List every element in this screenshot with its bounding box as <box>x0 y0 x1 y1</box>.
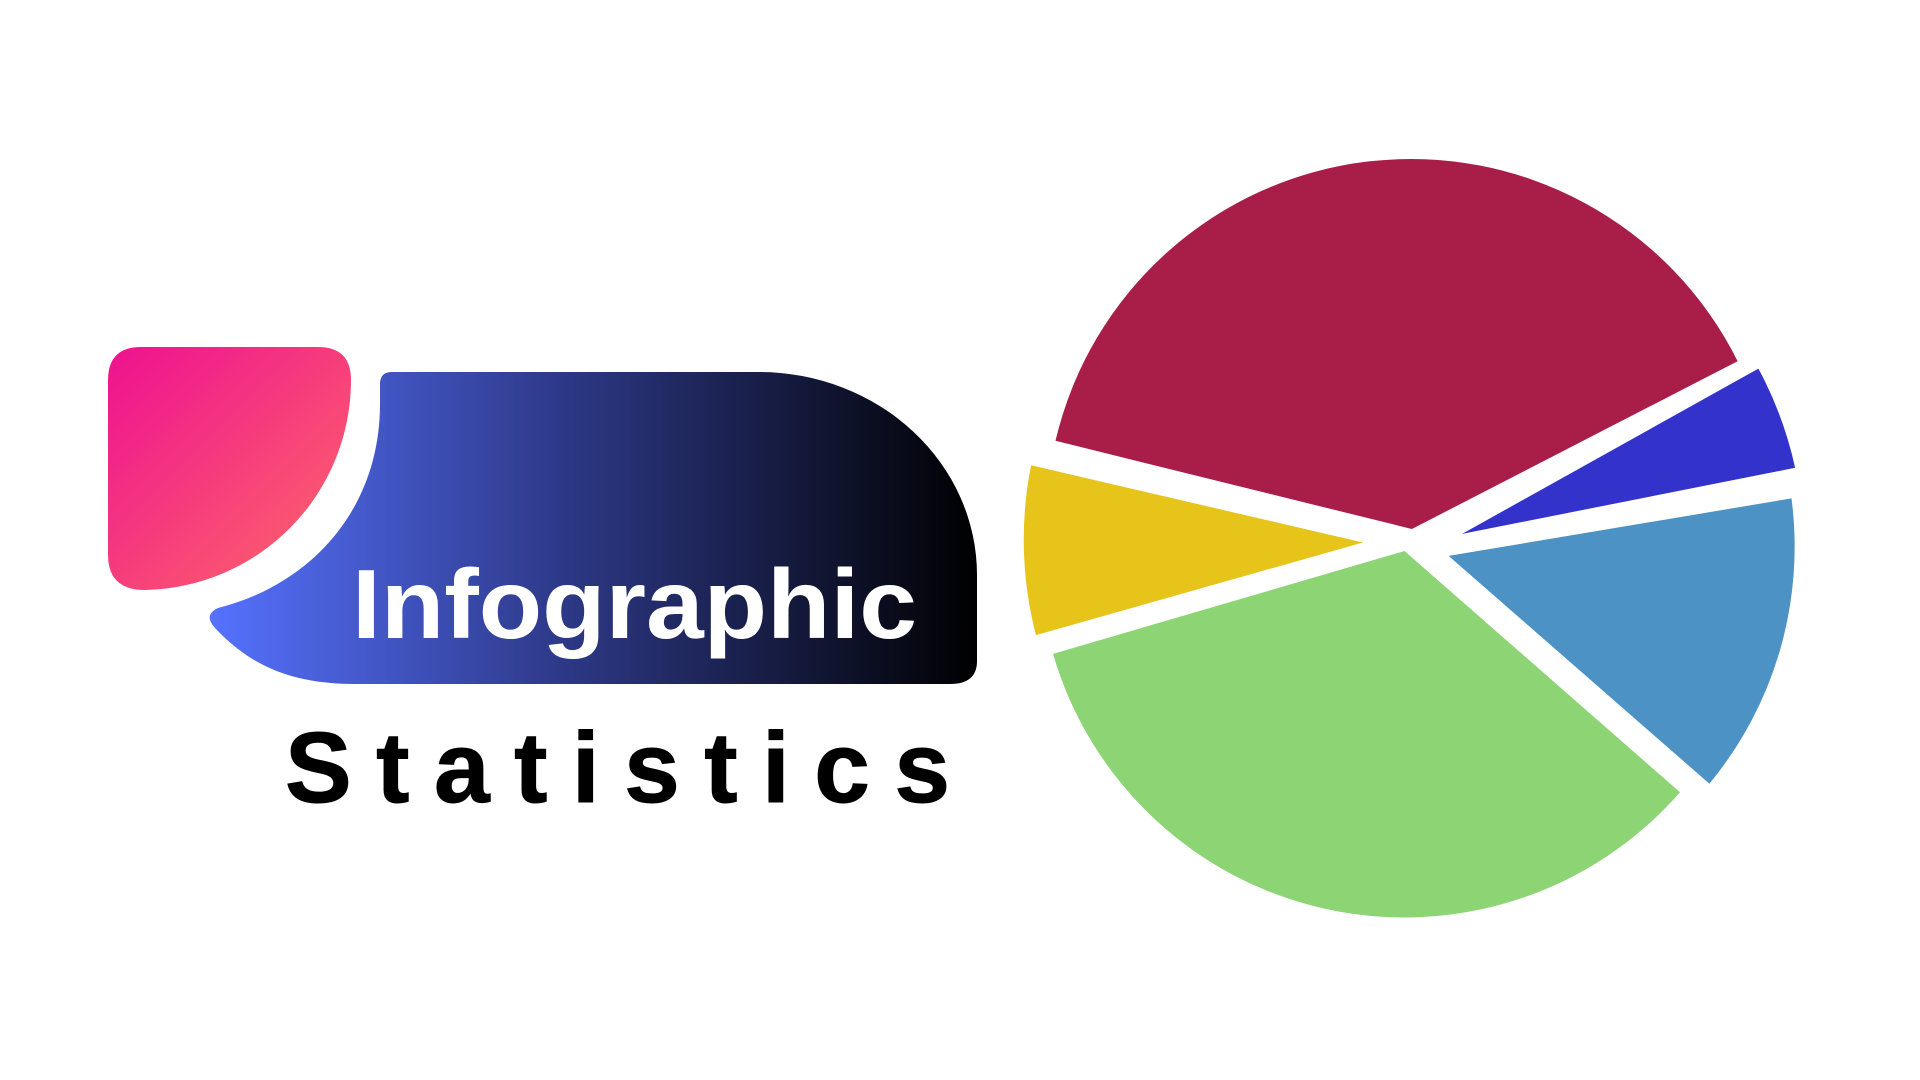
slice: dark blue <box>1462 369 1795 534</box>
icon: pink rounded shape <box>108 347 351 590</box>
pie chart <box>1024 159 1795 917</box>
heading: Statistics: Statistics <box>285 712 950 824</box>
slice: green <box>1053 551 1680 917</box>
slice: red <box>1056 159 1738 529</box>
slice: yellow <box>1024 465 1363 635</box>
slice: light blue <box>1449 498 1795 784</box>
banner: dark gradient shape <box>210 372 977 684</box>
heading: Infographic: Infographic <box>352 549 917 659</box>
